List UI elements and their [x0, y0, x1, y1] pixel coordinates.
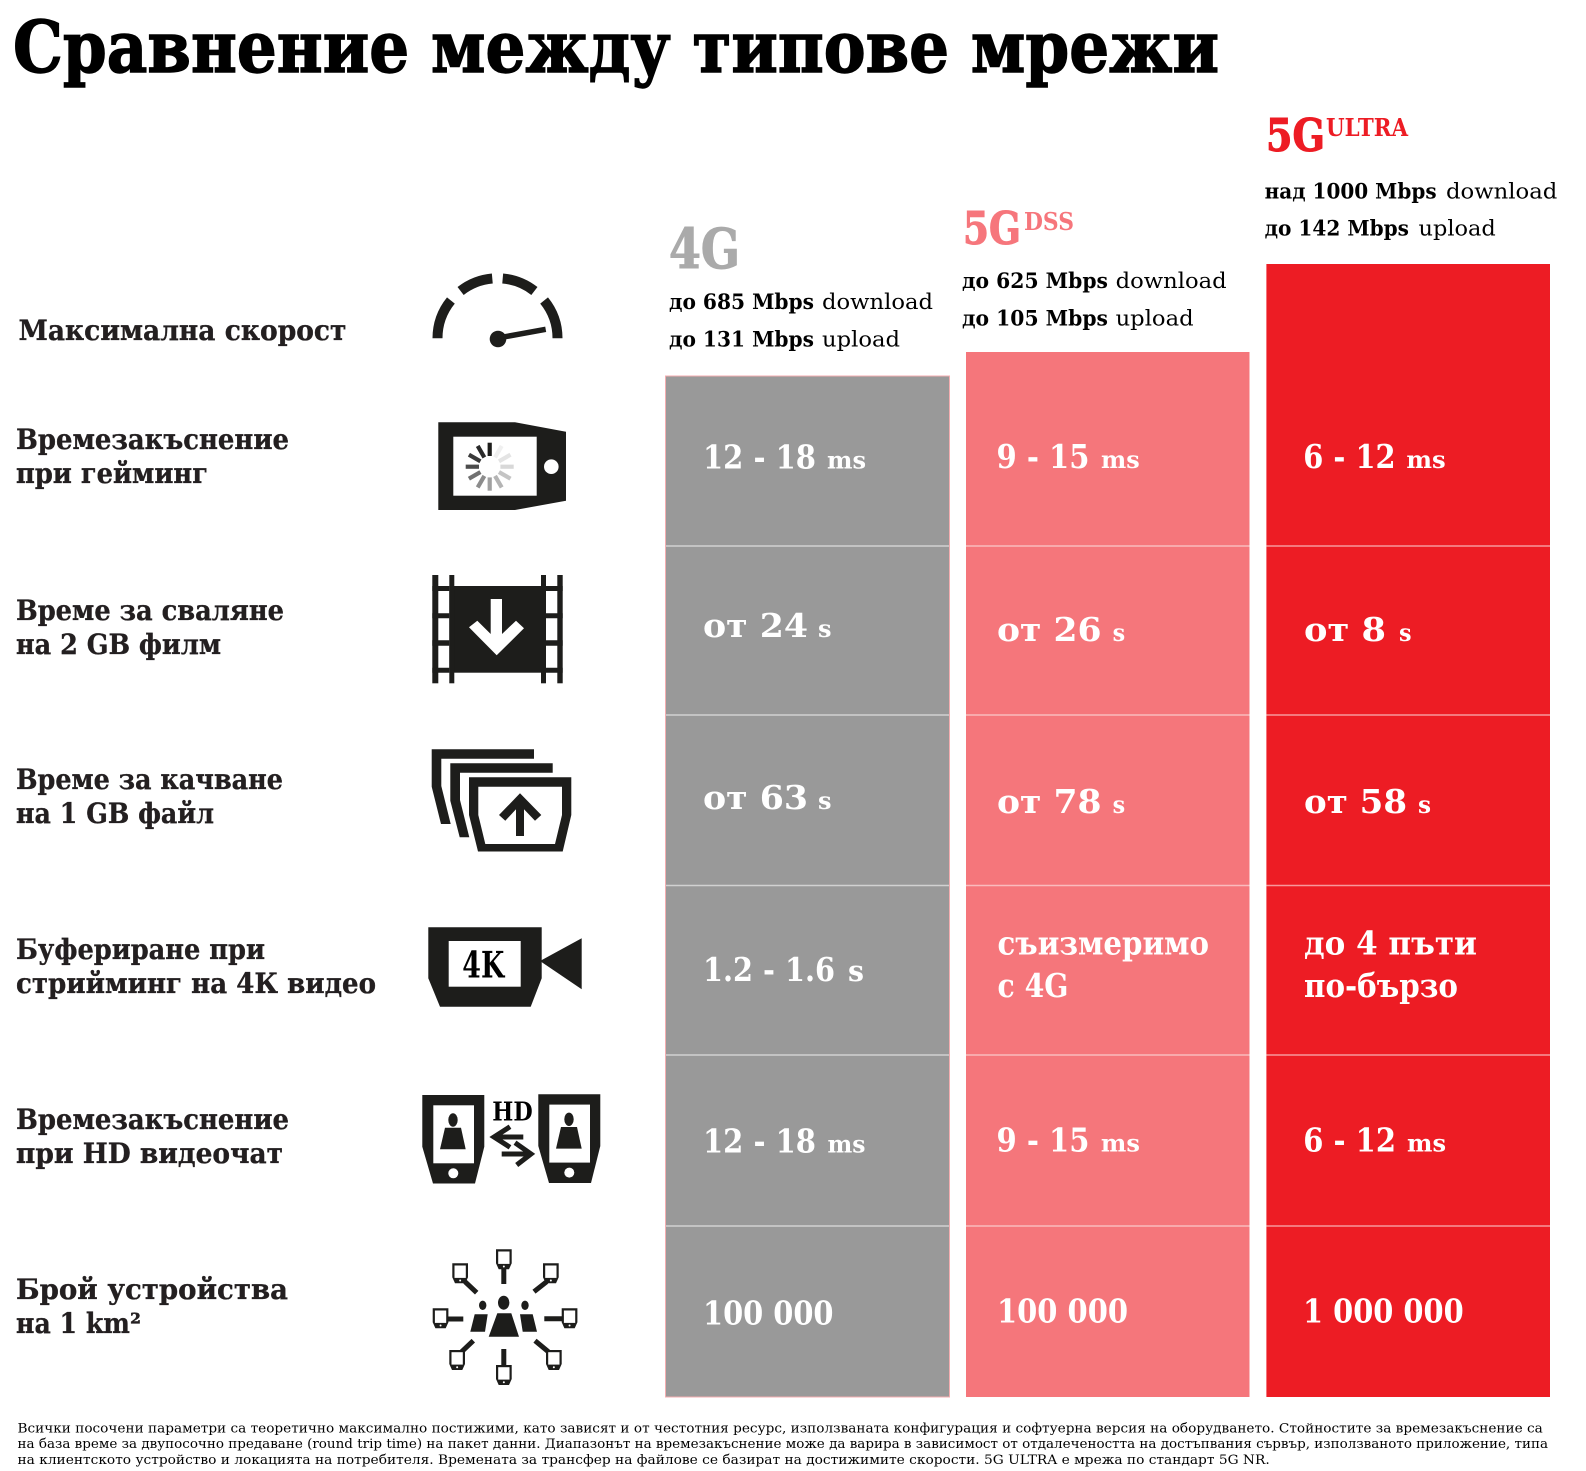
- 4G speeds: до 131 Mbps: [669, 327, 814, 352]
- 5G DSS values: от 78: [997, 782, 1102, 821]
- 5G ULTRA heading: 5G: [1266, 109, 1325, 162]
- 4G values: 1.2 - 1.6: [703, 950, 835, 989]
- 4G values: s: [848, 954, 864, 988]
- label: film download time: [16, 594, 284, 661]
- 5G DSS values: от 26: [997, 610, 1102, 649]
- 4G values: s: [818, 614, 832, 643]
- icon: film strip with download arrow: [432, 575, 563, 683]
- label: file upload time: на 1 GB файл: [16, 797, 214, 830]
- 4G values: от 63: [703, 778, 808, 817]
- 5G ULTRA values: s: [1418, 790, 1431, 819]
- 5G ULTRA speeds: над 1000 Mbps: [1265, 179, 1437, 204]
- icon: 4K video camera: 4K: [462, 944, 506, 986]
- 5G DSS values: 9 - 15: [996, 437, 1090, 476]
- 4G speeds: [669, 289, 933, 352]
- label: gaming latency: [16, 423, 289, 490]
- 5G ULTRA values: ms: [1406, 445, 1446, 474]
- 5G DSS speeds: до 105 Mbps: [962, 306, 1108, 331]
- 5G DSS values: s: [1113, 790, 1125, 819]
- label: file upload time: [16, 763, 283, 830]
- 4G heading: 4G: [669, 216, 740, 281]
- 5G DSS heading: DSS: [1024, 207, 1074, 236]
- icon: 4K video camera: [428, 927, 582, 1007]
- 5G DSS values: [966, 437, 1250, 1331]
- 5G DSS speeds: download: [1116, 269, 1227, 293]
- 5G ULTRA values: по-бързо: [1304, 966, 1458, 1005]
- label: HD video chat latency: Времезакъснение: [16, 1103, 289, 1136]
- label: devices per km2: [16, 1273, 288, 1340]
- label: file upload time: Време за качване: [16, 763, 283, 796]
- label: gaming latency: Времезакъснение: [16, 423, 289, 456]
- row labels: [16, 314, 376, 1340]
- label: 4K streaming buffering: стрийминг на 4К видео: [16, 967, 376, 1000]
- 5G DSS values: съизмеримо: [998, 924, 1209, 962]
- 4G values: 12 - 18: [703, 1121, 816, 1160]
- 5G ULTRA values: до 4 пъти: [1304, 924, 1477, 962]
- 4G values: s: [818, 786, 832, 815]
- 5G ULTRA bar: [1266, 264, 1550, 1397]
- 4G values: ms: [828, 1129, 866, 1158]
- 4G values: [666, 438, 949, 1332]
- footnote: на база време за двупосочно предаване (round trip time) на пакет данни. Диапазонът на времезакъснение може да варира в зависимост от отдалечеността на достъпвания сървър, използваното приложение, типа: [18, 1437, 1548, 1452]
- 5G DSS values: ms: [1101, 445, 1140, 474]
- 5G ULTRA values: s: [1399, 618, 1412, 647]
- label: film download time: Време за сваляне: [16, 594, 284, 627]
- title: Сравнение между типове мрежи: [13, 5, 1219, 89]
- footnote: Всички посочени параметри са теоретично максимално постижими, като зависят и от честотния ресурс, използваната конфигурация и софтуерна версия на оборудването. Стойностите за времезакъснение са: [18, 1422, 1543, 1436]
- icon: HD video chat between two phones: [422, 1094, 600, 1184]
- icon: stacked frames with upload arrow: [432, 749, 571, 852]
- 5G ULTRA speeds: до 142 Mbps: [1265, 216, 1409, 241]
- 5G ULTRA values: ms: [1407, 1129, 1446, 1158]
- 4G speeds: до 685 Mbps: [669, 289, 814, 314]
- 5G DSS values: s: [1113, 618, 1125, 647]
- label: 4K streaming buffering: [16, 933, 376, 1000]
- panel: 5G DSS column: [962, 202, 1250, 1397]
- 5G DSS values: 100 000: [997, 1292, 1128, 1331]
- 4G speeds: download: [822, 290, 933, 314]
- panel: 5G ULTRA column: [1265, 109, 1557, 1397]
- 5G DSS values: 9 - 15: [996, 1121, 1090, 1160]
- 5G ULTRA values: 6 - 12: [1303, 437, 1396, 476]
- panel: 4G column: [666, 216, 950, 1397]
- 4G values: 12 - 18: [703, 438, 816, 476]
- 4G values: ms: [827, 446, 866, 474]
- 4G values: от 24: [703, 606, 808, 645]
- 4G values: 100 000: [703, 1293, 834, 1332]
- 5G ULTRA values: 1 000 000: [1303, 1292, 1464, 1331]
- label: devices per km2: Брой устройства: [16, 1273, 288, 1306]
- label: 4K streaming buffering: Буфериране при: [16, 933, 265, 966]
- icon: speedometer: [438, 278, 558, 347]
- 5G DSS heading: [963, 202, 1074, 255]
- label: devices per km2: на 1 km²: [16, 1307, 141, 1340]
- 5G ULTRA speeds: download: [1446, 180, 1557, 204]
- 5G ULTRA heading: ULTRA: [1326, 113, 1408, 142]
- 4G speeds: upload: [822, 328, 900, 352]
- label: maximum speed: Максимална скорост: [18, 314, 346, 347]
- 5G ULTRA speeds: [1265, 179, 1557, 241]
- 5G ULTRA speeds: upload: [1418, 217, 1496, 241]
- icon: people connected to many devices: [433, 1249, 577, 1385]
- 5G DSS speeds: до 625 Mbps: [962, 268, 1108, 293]
- label: gaming latency: при гейминг: [16, 457, 208, 490]
- icon: HD video chat between two phones: HD: [492, 1098, 533, 1128]
- 5G DSS speeds: upload: [1116, 307, 1194, 331]
- footnote: на клиентското устройство и локацията на потребителя. Времената за трансфер на файлове се базират на достижимите скорости. 5G ULTRA е мрежа по стандарт 5G NR.: [18, 1453, 1270, 1468]
- 4G bar: [666, 376, 950, 1397]
- footnote: [18, 1422, 1548, 1468]
- 5G DSS speeds: [962, 268, 1227, 331]
- label: film download time: на 2 GB филм: [16, 628, 221, 661]
- 5G DSS heading: 5G: [963, 202, 1021, 255]
- 5G ULTRA values: от 58: [1304, 782, 1407, 821]
- 5G ULTRA values: 6 - 12: [1303, 1121, 1396, 1160]
- 5G ULTRA values: [1266, 437, 1550, 1331]
- label: HD video chat latency: при HD видеочат: [16, 1137, 283, 1170]
- icon: game console with loading spinner: [438, 422, 566, 510]
- label: HD video chat latency: [16, 1103, 289, 1170]
- 5G DSS values: с 4G: [998, 966, 1068, 1005]
- 5G DSS bar: [966, 352, 1250, 1397]
- 5G ULTRA heading: [1266, 109, 1408, 162]
- 5G ULTRA values: от 8: [1304, 610, 1386, 649]
- 5G DSS values: ms: [1101, 1129, 1140, 1158]
